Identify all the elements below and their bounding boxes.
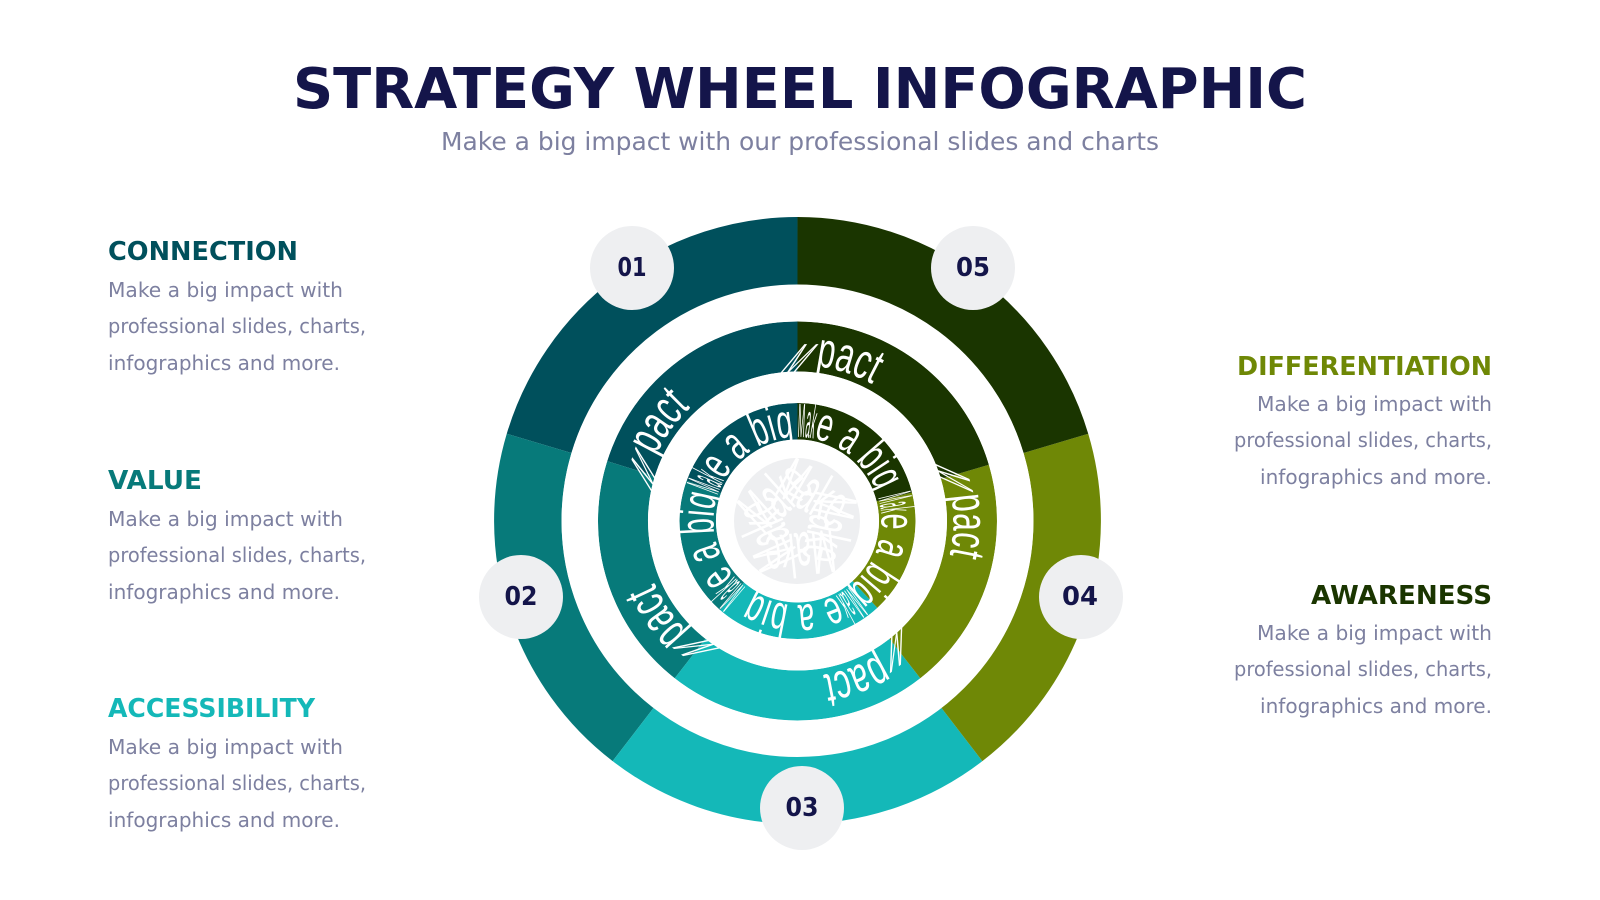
warped ring text: pact xyxy=(816,340,884,384)
badge 02: 02 xyxy=(504,582,538,612)
warped ring text: Mak xyxy=(711,576,746,612)
right text block: awareness: infographics and more. xyxy=(1260,694,1492,718)
warped ring text: pact xyxy=(626,583,692,648)
left text block: accessibility: ACCESSIBILITY xyxy=(108,694,316,724)
right text block: awareness: AWARENESS xyxy=(1311,581,1492,611)
warped ring text: pact xyxy=(945,494,983,560)
warped ring text: Mak xyxy=(836,588,868,624)
centre disc with warped text xyxy=(734,458,860,584)
warped ring text: e a big xyxy=(680,492,731,588)
centre disc with warped text: Make xyxy=(726,448,824,546)
badge 03 xyxy=(760,766,844,850)
warped ring text: Mak xyxy=(798,404,818,438)
right text block: differentiation: professional slides, charts, xyxy=(1234,428,1492,452)
badge 01 xyxy=(590,226,674,310)
badge 04: 04 xyxy=(1062,582,1098,612)
left text block: accessibility: infographics and more. xyxy=(108,808,340,832)
badge 04 xyxy=(1039,555,1123,639)
right text block: differentiation: DIFFERENTIATION xyxy=(1237,352,1492,382)
badge 02 xyxy=(479,555,563,639)
inner ring segments xyxy=(698,421,897,621)
left text block: value xyxy=(108,466,366,604)
left text block: accessibility: professional slides, charts, xyxy=(108,771,366,795)
title: STRATEGY WHEEL INFOGRAPHIC xyxy=(293,57,1307,122)
white separator rings xyxy=(580,303,1015,739)
centre disc with warped text: Make xyxy=(722,488,813,580)
left text block: accessibility: Make a big impact with xyxy=(108,735,343,759)
badge 01: 01 xyxy=(618,253,646,283)
left text block: accessibility xyxy=(108,694,366,832)
warped ring text: e a big xyxy=(706,407,792,476)
warped ring text: M xyxy=(888,614,904,687)
subtitle: Make a big impact with our professional slides and charts xyxy=(441,127,1159,156)
left text block: value: Make a big impact with xyxy=(108,507,343,531)
left text block: value: infographics and more. xyxy=(108,580,340,604)
strategy wheel xyxy=(479,217,1123,850)
left text block: connection: Make a big impact with xyxy=(108,278,343,302)
badge 05 xyxy=(931,226,1015,310)
warped ring text: Mak xyxy=(686,467,724,494)
centre disc with warped text: Make xyxy=(788,486,870,569)
left text block: connection xyxy=(108,237,366,375)
warped ring text: e a big xyxy=(744,591,842,638)
warped ring text: M xyxy=(658,636,733,660)
left text block: connection: professional slides, charts, xyxy=(108,314,366,338)
warped ring text: e a big xyxy=(816,415,899,491)
right text block: differentiation: infographics and more. xyxy=(1260,465,1492,489)
badge 05: 05 xyxy=(956,253,990,283)
right text block: awareness: professional slides, charts, xyxy=(1234,657,1492,681)
right text block: differentiation: Make a big impact with xyxy=(1257,392,1492,416)
warped ring text: pact xyxy=(633,387,690,458)
left text block: value: professional slides, charts, xyxy=(108,543,366,567)
centre disc with warped text: Make xyxy=(766,445,861,540)
warped ring text: e a big xyxy=(847,514,908,607)
right text block: awareness xyxy=(1234,581,1492,718)
outer ring segments xyxy=(528,251,1067,790)
middle ring segments xyxy=(623,346,972,695)
warped ring text: M xyxy=(924,457,985,499)
centre disc with warped text: Make xyxy=(762,515,839,591)
left text block: connection: CONNECTION xyxy=(108,237,298,267)
right text block: differentiation xyxy=(1234,352,1492,489)
warped ring text: M xyxy=(771,335,828,382)
left text block: connection: infographics and more. xyxy=(108,351,340,375)
right text block: awareness: Make a big impact with xyxy=(1257,621,1492,645)
left text block: value: VALUE xyxy=(108,466,202,496)
warped ring text: Mak xyxy=(878,490,914,514)
warped ring text: M xyxy=(624,434,663,503)
badge 03: 03 xyxy=(786,793,818,823)
warped ring text xyxy=(624,335,985,706)
centre white mask xyxy=(716,440,879,602)
warped ring text: pact xyxy=(823,650,890,706)
